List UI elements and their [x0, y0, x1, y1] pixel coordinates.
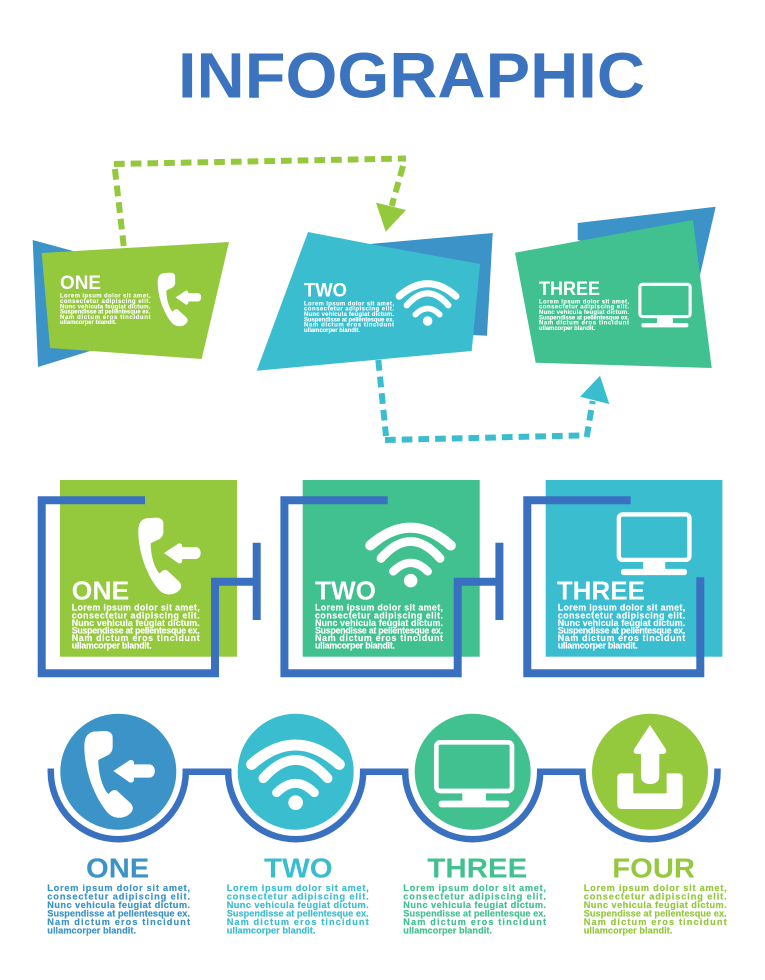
text block: banner three: consectetur adipiscing elit.: [539, 305, 629, 311]
text block: step three: Lorem ipsum dolor sit amet,: [403, 883, 546, 893]
text block: step one: Suspendisse at pellentesque ex.: [47, 908, 190, 918]
text block: step one: consectetur adipiscing elit.: [47, 892, 190, 902]
text block: square two: ullamcorper blandit.: [315, 641, 395, 651]
text block: step one: Nam dictum eros tincidunt: [47, 917, 190, 927]
icon: upload: [617, 725, 683, 809]
text block: step two: Nam dictum eros tincidunt: [227, 917, 369, 927]
text block: square three: ullamcorper blandit.: [558, 641, 638, 651]
arrow: cyan dashed connector from two to three: [378, 360, 609, 440]
text block: banner two: [304, 301, 394, 334]
icon: phone: [158, 273, 201, 326]
heading: step two: TWO: [264, 853, 333, 884]
text block: square two: consectetur adipiscing elit.: [315, 610, 443, 620]
text block: step one: ullamcorper blandit.: [47, 926, 136, 936]
text block: step three: Suspendisse at pellentesque ex.: [403, 908, 546, 918]
text block: square one: Nunc vehicula feugiat dictum.: [72, 618, 200, 628]
text block: step three: [403, 883, 546, 936]
heading: square three: THREE: [557, 575, 645, 605]
text block: square one: [72, 603, 200, 651]
text block: step four: [584, 883, 727, 936]
text block: square three: [558, 603, 685, 651]
timeline line with arcs: [51, 768, 718, 839]
icon: wifi: [370, 528, 451, 587]
text block: square two: Nunc vehicula feugiat dictum.: [315, 618, 443, 628]
text block: banner two: ullamcorper blandit.: [304, 328, 360, 334]
text block: banner one: Nunc vehicula feugiat dictum.: [60, 304, 151, 310]
icon: phone: [138, 518, 201, 594]
text block: step four: consectetur adipiscing elit.: [584, 892, 727, 902]
text block: square one: consectetur adipiscing elit.: [72, 610, 200, 620]
panel: square three: [527, 480, 722, 673]
text block: step four: Nam dictum eros tincidunt: [584, 917, 727, 927]
text block: step two: Lorem ipsum dolor sit amet,: [227, 883, 369, 893]
step one: [47, 714, 190, 936]
panel: banner one: [33, 240, 229, 367]
text block: step three: consectetur adipiscing elit.: [403, 892, 546, 902]
text block: step three: ullamcorper blandit.: [403, 926, 492, 936]
text block: banner two: consectetur adipiscing elit.: [304, 307, 394, 313]
text block: banner one: [60, 294, 151, 326]
heading: banner two: TWO: [304, 281, 347, 302]
text block: square one: Nam dictum eros tincidunt: [72, 633, 200, 643]
text block: step two: [227, 883, 369, 936]
text block: banner three: ullamcorper blandit.: [539, 326, 595, 332]
text block: banner three: Suspendisse at pellentesque ex.: [539, 315, 629, 321]
text block: banner one: Nam dictum eros tincidunt: [60, 315, 150, 321]
text block: square one: Suspendisse at pellentesque ex.: [72, 626, 200, 636]
text block: banner one: ullamcorper blandit.: [60, 320, 117, 326]
text block: square one: Lorem ipsum dolor sit amet,: [72, 603, 200, 613]
text block: banner three: Nunc vehicula feugiat dictum.: [539, 310, 629, 316]
bracket: square three: [527, 500, 700, 673]
heading: step one: ONE: [86, 853, 149, 884]
panel: banner three: [515, 207, 716, 368]
title: INFOGRAPHIC: [178, 40, 645, 112]
heading: square two: TWO: [315, 575, 376, 605]
text block: banner one: Suspendisse at pellentesque ex.: [60, 310, 151, 316]
text block: banner two: Nam dictum eros tincidunt: [304, 323, 394, 329]
text block: step one: Lorem ipsum dolor sit amet,: [47, 883, 190, 893]
step three: [403, 714, 546, 936]
heading: banner three: THREE: [539, 279, 600, 300]
text block: square two: Suspendisse at pellentesque ex.: [315, 626, 443, 636]
icon: monitor: [436, 742, 512, 807]
text block: step two: Suspendisse at pellentesque ex.: [227, 908, 369, 918]
text block: banner three: [539, 299, 629, 332]
text block: step four: Nunc vehicula feugiat dictum.: [584, 900, 727, 910]
text block: banner three: Nam dictum eros tincidunt: [539, 321, 629, 327]
text block: banner one: Lorem ipsum dolor sit amet,: [60, 294, 151, 300]
text block: step two: ullamcorper blandit.: [227, 926, 315, 936]
text block: step three: Nunc vehicula feugiat dictum.: [403, 900, 546, 910]
arrow: green dashed connector from one to two: [114, 158, 406, 246]
heading: square one: ONE: [72, 575, 129, 605]
text block: square two: Lorem ipsum dolor sit amet,: [315, 603, 443, 613]
text block: square three: Nunc vehicula feugiat dictum.: [558, 618, 685, 628]
heading: banner one: ONE: [60, 273, 101, 294]
text block: step one: Nunc vehicula feugiat dictum.: [47, 900, 190, 910]
text block: square three: Suspendisse at pellentesque ex.: [558, 626, 685, 636]
text block: square two: Nam dictum eros tincidunt: [315, 633, 443, 643]
text block: banner two: Nunc vehicula feugiat dictum.: [304, 312, 394, 318]
text block: step four: Suspendisse at pellentesque ex.: [584, 908, 727, 918]
icon: wifi: [252, 745, 339, 810]
text block: step two: consectetur adipiscing elit.: [227, 892, 369, 902]
icon: monitor: [640, 284, 690, 327]
text block: step one: [47, 883, 190, 936]
panel: square one: [42, 480, 257, 673]
heading: step four: FOUR: [612, 853, 695, 884]
text block: step four: Lorem ipsum dolor sit amet,: [584, 883, 727, 893]
bracket: square two: [284, 500, 499, 673]
icon: phone: [84, 731, 155, 818]
panel: banner two: [257, 232, 493, 371]
panel: square two: [284, 480, 499, 673]
text block: banner two: Suspendisse at pellentesque ex.: [304, 317, 394, 323]
icon: wifi: [399, 284, 456, 326]
step two: [227, 714, 369, 936]
text block: step three: Nam dictum eros tincidunt: [403, 917, 546, 927]
text block: banner two: Lorem ipsum dolor sit amet,: [304, 301, 394, 307]
text block: step four: ullamcorper blandit.: [584, 926, 672, 936]
text block: square two: [315, 603, 443, 651]
text block: banner one: consectetur adipiscing elit.: [60, 299, 151, 305]
heading: step three: THREE: [427, 853, 527, 884]
text block: square three: consectetur adipiscing elit.: [558, 610, 685, 620]
text block: banner three: Lorem ipsum dolor sit amet,: [539, 299, 629, 305]
bracket: square one: [42, 500, 257, 673]
text block: step two: Nunc vehicula feugiat dictum.: [227, 900, 369, 910]
text block: square three: Lorem ipsum dolor sit amet,: [558, 603, 685, 613]
step four: [584, 714, 727, 936]
text block: square one: ullamcorper blandit.: [72, 641, 152, 651]
icon: monitor: [619, 514, 689, 575]
text block: square three: Nam dictum eros tincidunt: [558, 633, 685, 643]
